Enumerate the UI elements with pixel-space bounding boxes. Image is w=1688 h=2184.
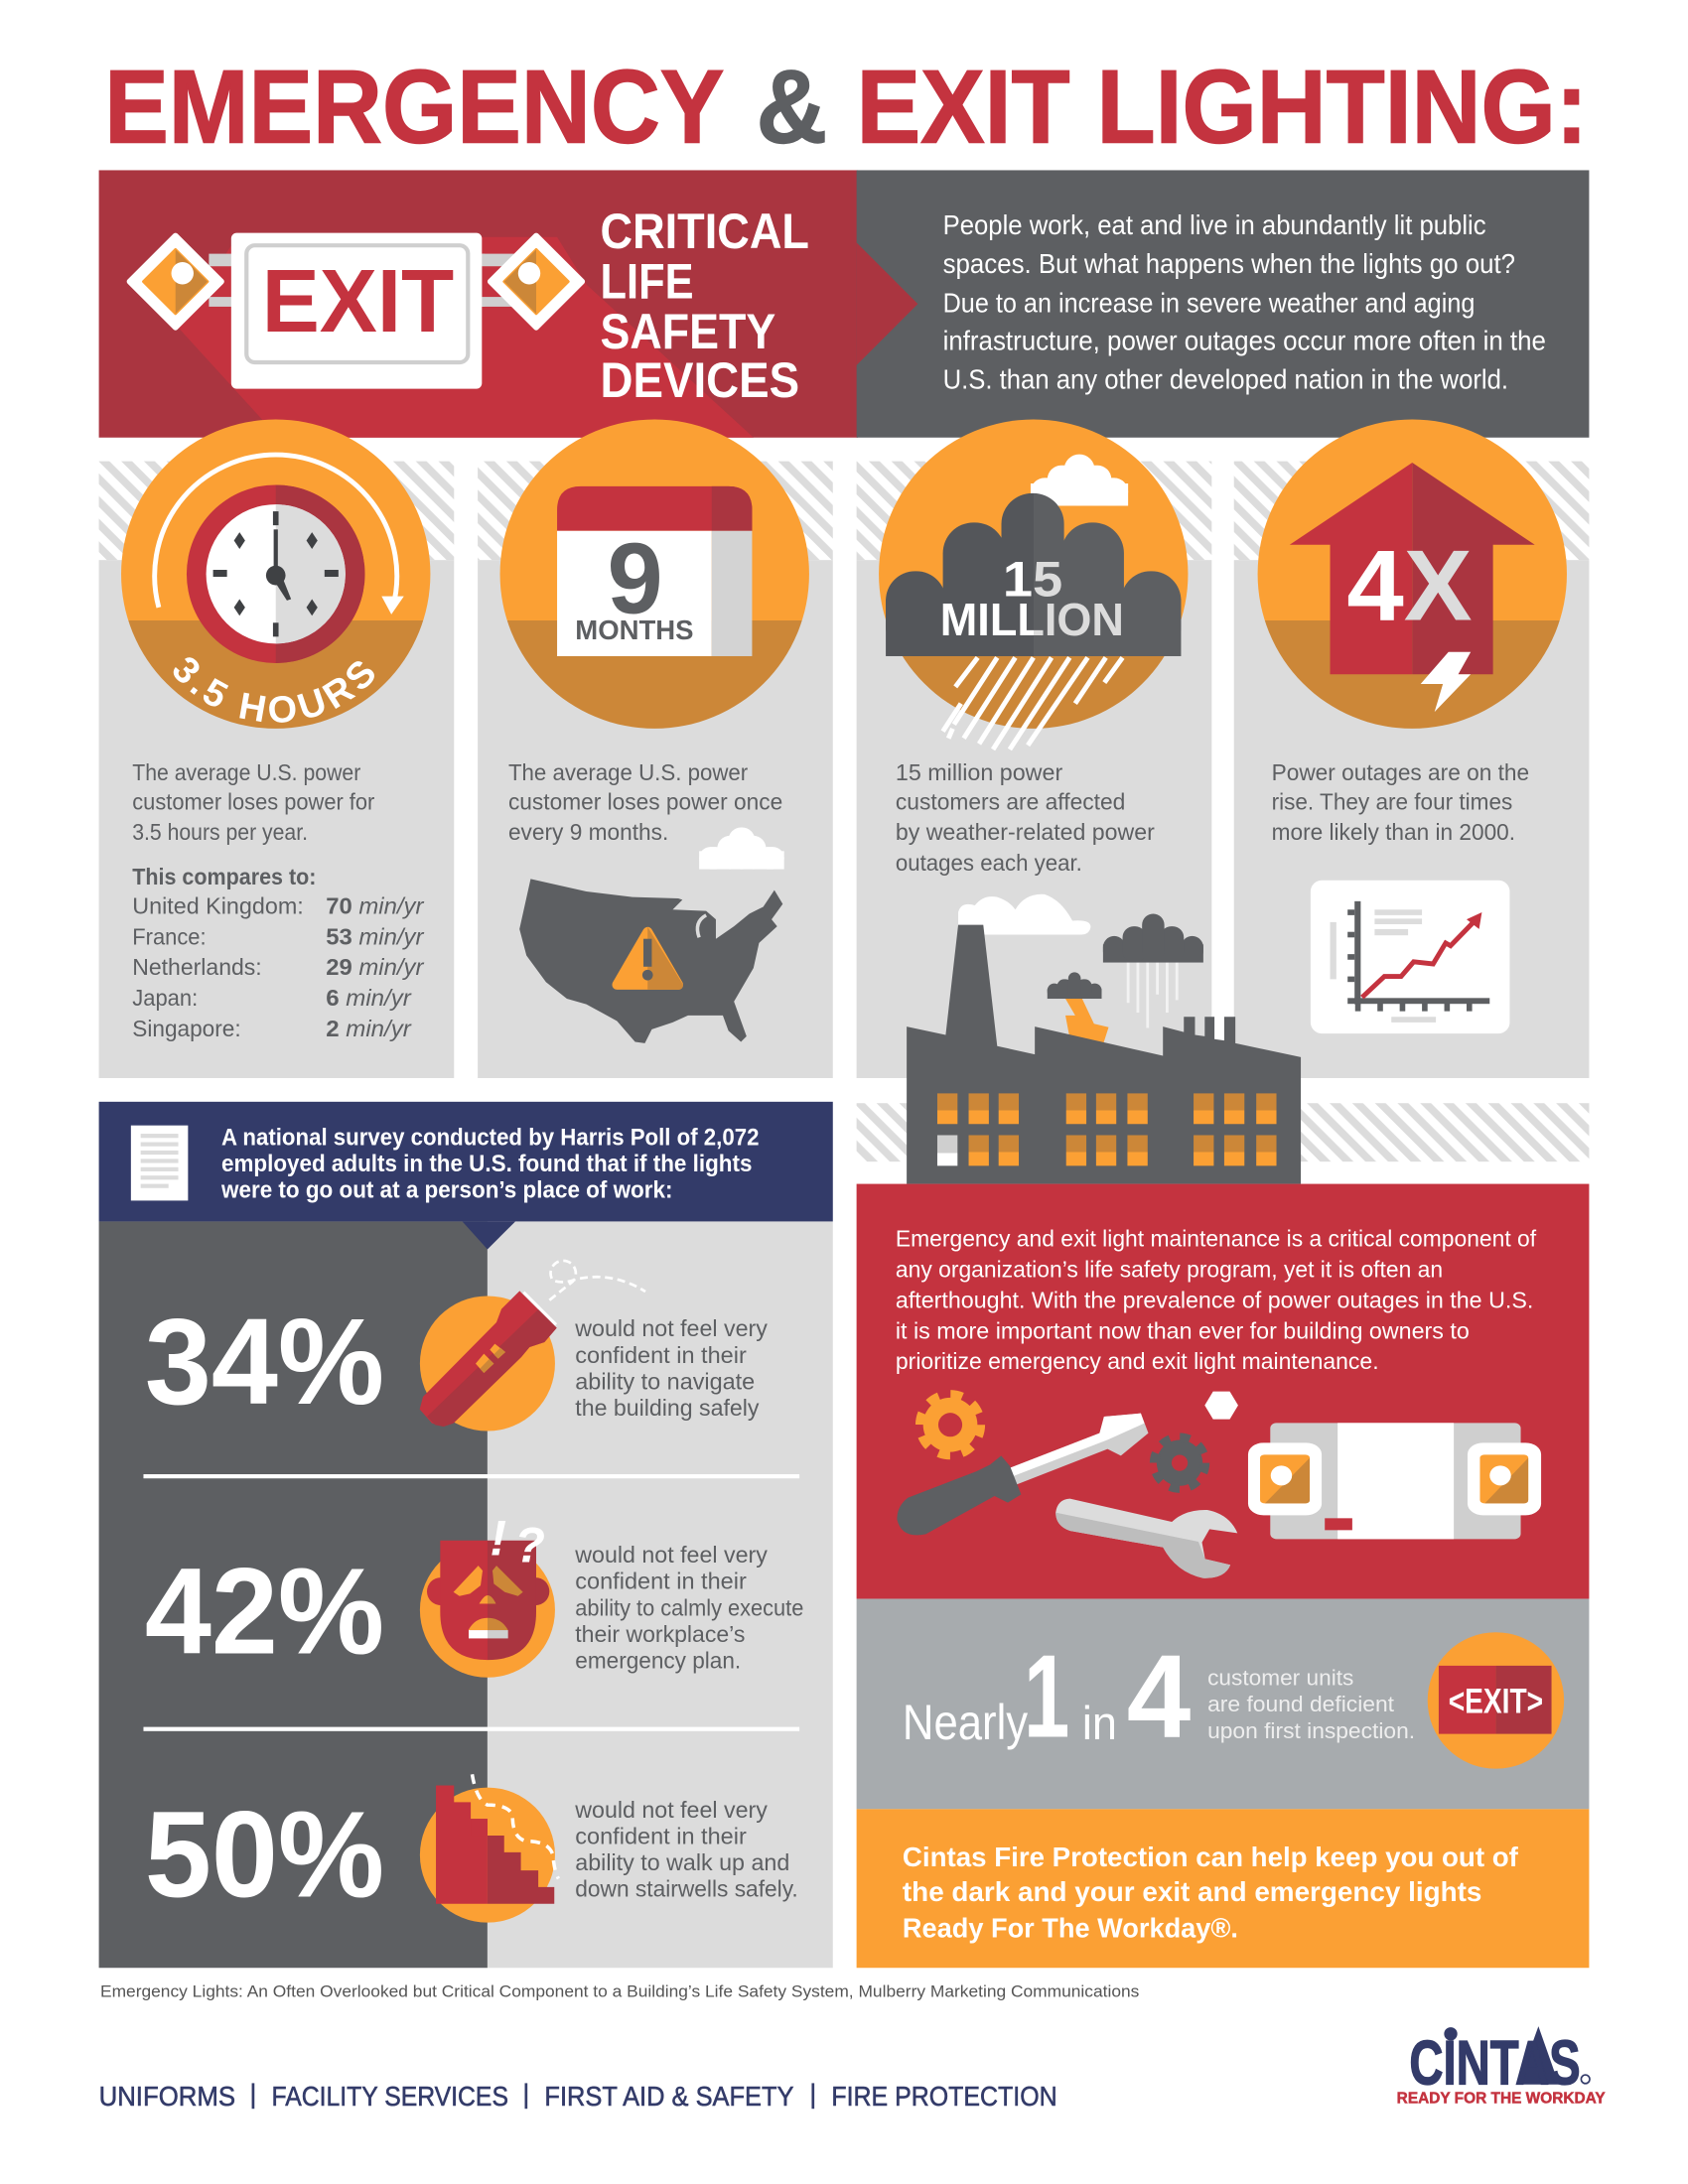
illustration: tools and light unit — [897, 1414, 1541, 1578]
icon: storm cloud with 15 million — [886, 493, 1181, 656]
illustration: factory in storm — [907, 894, 1301, 1184]
panel: call to action: Cintas Fire Protection can help keep you out of — [903, 1842, 1519, 1872]
icon: calendar: 9 — [608, 523, 663, 634]
stat: nearly 1 in 4: in — [1082, 1698, 1117, 1750]
icon: worried face: ? — [514, 1518, 545, 1573]
text: 15 million description: outages each year. — [896, 850, 1082, 876]
icon: storm cloud with 15 million: 15 — [1003, 551, 1062, 608]
hatch band behind factory — [857, 1103, 1589, 1161]
text: maintenance paragraph: afterthought. With the prevalence of power outages in the U.S. — [896, 1287, 1533, 1312]
stat row: 50 percent: would not feel very — [574, 1797, 768, 1823]
text: 9 months description: The average U.S. power — [508, 759, 748, 785]
stat row: 34 percent: confident in their — [575, 1342, 747, 1368]
icon: dark gear — [1155, 1437, 1204, 1488]
panel: nearly 1 in 4 — [857, 1599, 1589, 1809]
stat row: 50 percent: 50% — [145, 1787, 384, 1924]
text: 4X description: Power outages are on the — [1272, 759, 1529, 785]
text: 9 months description: every 9 months. — [508, 819, 668, 845]
table: comparison by country: This compares to: — [132, 864, 316, 889]
icon: exit badge — [1428, 1632, 1564, 1769]
logo: Cintas: CINTAS — [1409, 2029, 1581, 2099]
icon: rising arrow with 4X: 4X — [1346, 531, 1473, 642]
icon: screwdriver — [897, 1414, 1149, 1535]
survey intro text: employed adults in the U.S. found that if the lights — [221, 1151, 752, 1177]
intro paragraph — [943, 209, 1546, 395]
intro paragraph: infrastructure, power outages occur more often in the — [943, 325, 1546, 355]
panel: maintenance — [857, 1184, 1589, 1599]
icon: worried face — [427, 1510, 549, 1660]
text: 9 months description — [508, 759, 782, 845]
curved label: 3.5 hours: 3.5 HOURS — [173, 657, 374, 723]
stat row: 42 percent: confident in their — [575, 1569, 747, 1594]
footer services list: FIRST AID & SAFETY — [544, 2081, 794, 2112]
survey intro text: A national survey conducted by Harris Poll of 2,072 — [221, 1124, 759, 1151]
table: comparison by country: 6 min/yr — [326, 985, 412, 1011]
panel: stat 3.5 hours — [99, 419, 455, 1078]
icon: rising arrow with 4X — [1290, 463, 1535, 712]
survey intro text — [220, 1124, 759, 1204]
text: 3.5 hours description: 3.5 hours per year. — [132, 819, 308, 845]
icon: white cloud — [1031, 455, 1128, 505]
panel: stat 9 months — [478, 420, 833, 1078]
stat row: 42 percent: their workplace’s — [575, 1621, 745, 1647]
icon: flashlight — [420, 1261, 645, 1427]
text: 15 million description: by weather-related power — [896, 819, 1155, 845]
intro paragraph: U.S. than any other developed nation in the world. — [943, 364, 1508, 395]
heading: critical life safety devices: CRITICAL — [601, 203, 809, 259]
icon: storm cloud with 15 million: MILLION — [940, 594, 1124, 645]
title: EXIT LIGHTING: — [857, 49, 1588, 165]
panel: survey header — [99, 1102, 833, 1221]
text: maintenance paragraph: it is more important now than ever for building owners to — [896, 1317, 1470, 1343]
icon: exit sign — [129, 233, 582, 389]
text: deficient units — [1207, 1666, 1415, 1743]
icon: smoke cloud — [958, 894, 1090, 935]
stat row: 34 percent — [145, 1261, 768, 1432]
title: & — [757, 49, 827, 165]
stat row: 42 percent: 42% — [145, 1543, 384, 1680]
table: comparison by country: France: — [132, 923, 207, 949]
text: maintenance paragraph: any organization’s life safety program, yet it is often an — [896, 1257, 1443, 1283]
stat row: 34 percent: would not feel very — [574, 1315, 768, 1341]
stat row: 42 percent: emergency plan. — [575, 1648, 741, 1674]
table: comparison by country: 53 min/yr — [326, 923, 425, 949]
stat: nearly 1 in 4: 1 — [1024, 1630, 1069, 1762]
text: 4X description: more likely than in 2000. — [1272, 819, 1515, 845]
table: comparison by country: Netherlands: — [132, 954, 262, 980]
icon: calendar — [557, 486, 752, 656]
icon: orange gear — [921, 1396, 979, 1454]
stat row: 50 percent: down stairwells safely. — [575, 1876, 798, 1902]
footer services list: FIRE PROTECTION — [831, 2081, 1057, 2112]
table: comparison by country: 29 min/yr — [326, 954, 425, 980]
stat row: 34 percent: 34% — [145, 1294, 384, 1431]
footer services list — [99, 2081, 1057, 2112]
map: United States with warning — [519, 879, 782, 1043]
title: EMERGENCY — [104, 49, 724, 165]
icon: clock — [155, 455, 404, 663]
panel: call to action: the dark and your exit and emergency lights — [903, 1876, 1481, 1907]
stat row: 42 percent — [145, 1510, 803, 1680]
intro paragraph: People work, eat and live in abundantly lit public — [943, 209, 1486, 240]
stat row: 50 percent: ability to walk up and — [575, 1849, 789, 1875]
stat row: 50 percent: confident in their — [575, 1823, 747, 1848]
icon: emergency light unit — [1248, 1423, 1541, 1539]
panel: intro banner — [99, 170, 1589, 438]
text: 15 million description: customers are affected — [896, 788, 1125, 814]
footer services list: UNIFORMS — [99, 2081, 235, 2112]
title — [104, 49, 1588, 165]
stat: nearly 1 in 4: 4 — [1127, 1630, 1191, 1762]
text: maintenance paragraph: Emergency and exit light maintenance is a critical component of — [896, 1226, 1537, 1252]
text: 3.5 hours description — [132, 759, 375, 845]
source citation: Emergency Lights: An Often Overlooked but Critical Component to a Building’s Life Safety System, Mulberry Marketing Communications — [100, 1982, 1139, 2001]
table: comparison by country: United Kingdom: — [132, 892, 304, 918]
footer services list: FACILITY SERVICES — [272, 2081, 508, 2112]
icon: warning triangle — [617, 927, 683, 990]
icon: small white cloud — [699, 827, 784, 870]
stat row: 42 percent: ability to calmly execute — [575, 1594, 803, 1620]
logo: Cintas: READY FOR THE WORKDAY — [1397, 2091, 1606, 2108]
table: comparison by country: 2 min/yr — [326, 1016, 412, 1041]
text: 3.5 hours description: The average U.S. power — [132, 759, 361, 785]
icon: worried face: ! — [490, 1510, 506, 1566]
icon: document — [131, 1126, 188, 1200]
intro paragraph: Due to an increase in severe weather and aging — [943, 288, 1475, 319]
table: comparison by country: Singapore: — [132, 1016, 241, 1041]
icon: calendar: MONTHS — [575, 614, 694, 645]
heading: critical life safety devices: SAFETY — [601, 303, 775, 359]
icon: exit sign: EXIT — [262, 252, 454, 351]
icon: wrench — [1055, 1499, 1237, 1578]
heading: critical life safety devices: LIFE — [601, 252, 694, 309]
table: comparison by country — [132, 864, 425, 1041]
stat: nearly 1 in 4: Nearly — [903, 1694, 1029, 1750]
text: 3.5 hours description: customer loses power for — [132, 788, 375, 814]
text: 15 million description: 15 million power — [896, 759, 1063, 785]
table: comparison by country: Japan: — [132, 985, 198, 1011]
panel: stat 15 million — [857, 420, 1211, 1078]
table: comparison by country: 70 min/yr — [326, 892, 425, 918]
heading: critical life safety devices: DEVICES — [601, 351, 799, 408]
stat row: 50 percent — [145, 1774, 798, 1924]
text: maintenance paragraph: prioritize emergency and exit light maintenance. — [896, 1348, 1379, 1374]
text: 9 months description: customer loses power once — [508, 788, 782, 814]
text: 4X description — [1272, 759, 1529, 845]
icon: rain stripes — [943, 657, 1123, 750]
survey intro text: were to go out at a person’s place of work: — [220, 1177, 672, 1204]
panel: stat 4X — [1234, 420, 1589, 1078]
text: maintenance paragraph — [896, 1226, 1537, 1374]
text: deficient units: are found deficient — [1207, 1692, 1395, 1716]
intro paragraph: spaces. But what happens when the lights go out? — [943, 248, 1515, 279]
icon: dark rain cloud — [1103, 913, 1203, 1027]
text: deficient units: upon first inspection. — [1207, 1718, 1415, 1743]
chart: rising outage line — [1311, 881, 1509, 1033]
text: 15 million description — [896, 759, 1155, 876]
text: deficient units: customer units — [1207, 1666, 1353, 1691]
panel: call to action: Ready For The Workday®. — [903, 1912, 1238, 1943]
panel: survey results — [99, 1221, 833, 1968]
icon: stairs — [436, 1774, 558, 1904]
icon: lightning cloud — [1048, 972, 1109, 1044]
icon: exit badge: <EXIT> — [1449, 1683, 1543, 1721]
heading: critical life safety devices — [601, 203, 809, 408]
factory windows — [937, 1093, 1277, 1165]
text: 4X description: rise. They are four times — [1272, 788, 1512, 814]
stat row: 34 percent: ability to navigate — [575, 1368, 755, 1394]
stat: nearly 1 in 4 — [903, 1630, 1191, 1762]
stat row: 34 percent: the building safely — [575, 1395, 760, 1421]
icon: hex nut — [1204, 1392, 1238, 1420]
panel: call to action — [857, 1809, 1589, 1968]
stat row: 42 percent: would not feel very — [574, 1542, 768, 1568]
